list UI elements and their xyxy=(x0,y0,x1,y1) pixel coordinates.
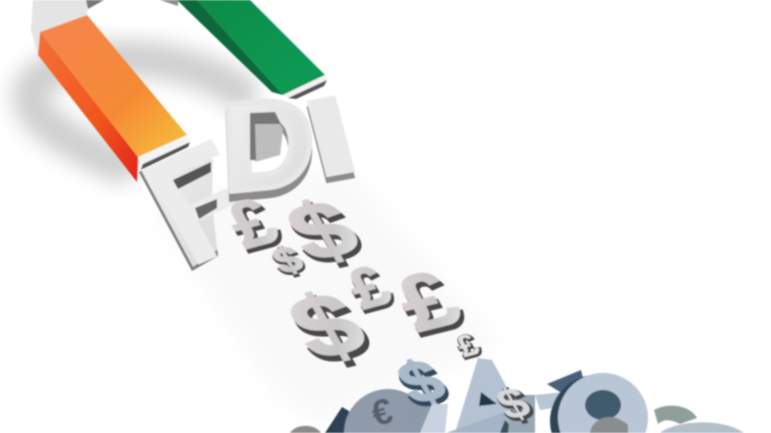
pile: small dollar: $ xyxy=(488,378,539,429)
pile: left grey blob xyxy=(290,426,321,433)
symbol: pound 2: £ xyxy=(337,256,404,324)
symbol: pound 2: £ xyxy=(335,253,402,321)
symbol: pound 3: £ xyxy=(380,254,476,348)
flying currency symbols xyxy=(213,182,486,384)
pile: dark wedge xyxy=(547,370,584,392)
magnet orange arm xyxy=(38,15,190,182)
symbol: dollar 2: $ xyxy=(275,277,386,384)
symbol: dollar 2: $ xyxy=(271,272,382,379)
pile: ring coin xyxy=(550,373,648,433)
letter F: F xyxy=(120,107,286,299)
magnet shadow xyxy=(30,58,240,165)
symbol: pound 3: £ xyxy=(383,258,479,352)
letter D: D xyxy=(218,78,318,228)
letter I: I xyxy=(291,78,371,207)
pile: small dollar: $ xyxy=(490,380,541,431)
pile: letter-like A shape xyxy=(420,358,525,433)
currency pile xyxy=(290,346,744,433)
symbol: dollar 1: $ xyxy=(274,186,377,282)
symbol: small dollar: $ xyxy=(265,238,310,281)
symbol: small pound: £ xyxy=(450,328,485,363)
symbol: small pound: £ xyxy=(451,329,486,364)
symbol: small dollar: $ xyxy=(266,240,311,283)
pile: euro coin xyxy=(344,389,432,433)
pile: dollar on top: $ xyxy=(388,350,459,420)
symbol: pound 1: £ xyxy=(216,186,293,265)
pile: right pieces xyxy=(654,406,744,433)
magnet green arm xyxy=(177,0,327,99)
pile: dark corner xyxy=(325,407,352,433)
letter D: D xyxy=(218,70,318,220)
symbol: pound 1: £ xyxy=(213,183,290,262)
magnet arch xyxy=(31,0,88,55)
symbol: dollar 1: $ xyxy=(271,182,374,278)
pile: euro coin: € xyxy=(367,390,397,433)
icon: horseshoe magnet xyxy=(31,0,327,182)
title: FDI letters xyxy=(120,70,371,299)
letter I: I xyxy=(291,72,371,201)
light beam xyxy=(150,165,500,425)
pile: dollar on top: $ xyxy=(386,346,457,416)
